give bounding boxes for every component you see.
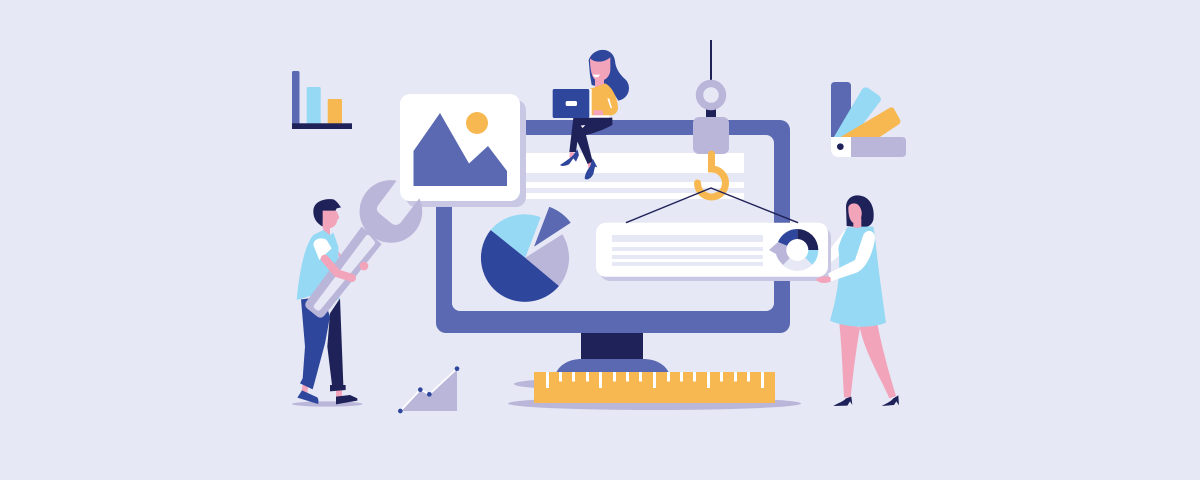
icon: bar chart — [292, 71, 352, 129]
image card with mountains and sun — [400, 94, 526, 207]
crane with hook — [693, 40, 729, 197]
woman with dress holding card — [830, 195, 899, 406]
monitor — [436, 120, 790, 373]
woman sitting with laptop — [553, 50, 629, 179]
woman's arm and hand — [816, 231, 875, 283]
donut chart — [769, 229, 818, 271]
man carrying giant wrench — [292, 180, 422, 407]
hoist cables — [626, 188, 798, 223]
wrench — [305, 180, 422, 318]
ruler — [534, 372, 775, 403]
icon: colour swatch fan — [831, 82, 906, 157]
icon: line chart area — [398, 366, 459, 413]
text card with donut chart — [596, 223, 831, 281]
floor shadows — [508, 378, 801, 410]
pie chart — [481, 207, 571, 302]
screen: website header stripes — [510, 153, 744, 199]
